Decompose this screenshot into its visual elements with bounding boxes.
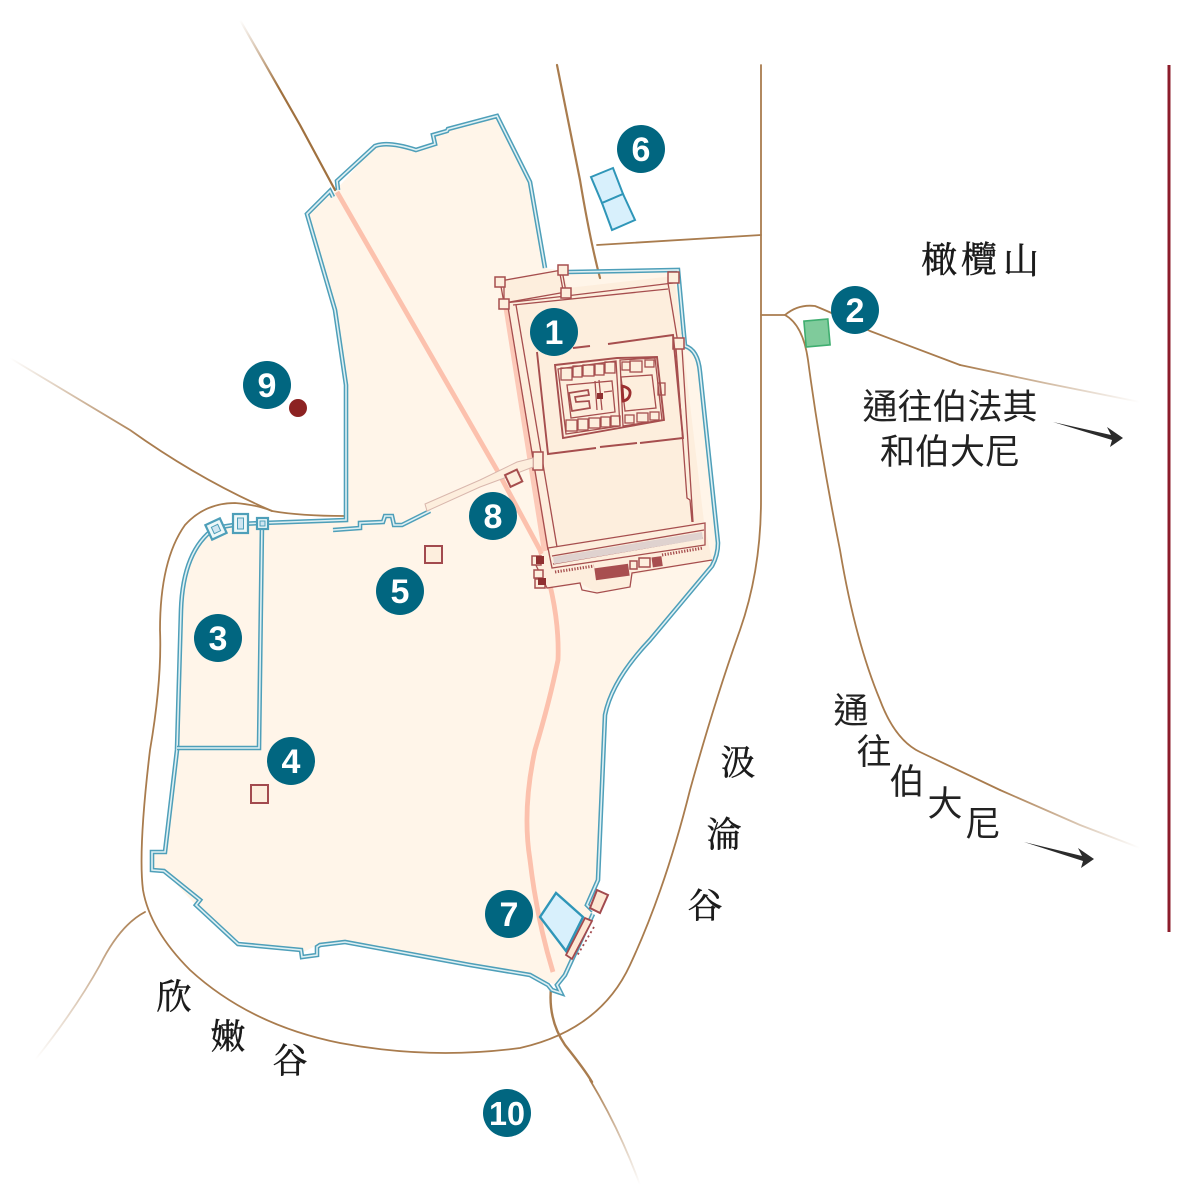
royal stoa stairs bbox=[594, 564, 630, 580]
number 2 bbox=[831, 286, 879, 334]
label: Mount of Olives bbox=[921, 240, 1039, 281]
number 8: 8 bbox=[484, 498, 502, 536]
stoa colonnade dots bbox=[555, 548, 703, 572]
number 10: 10 bbox=[489, 1095, 525, 1132]
number 4 bbox=[267, 737, 315, 785]
label: to Bethany: 大 bbox=[927, 785, 963, 824]
wall towers bbox=[205, 514, 268, 540]
corner towers bbox=[495, 265, 684, 588]
label: Hinnom Valley bbox=[156, 978, 308, 1081]
label: Kidron Valley: 谷 bbox=[687, 887, 723, 926]
temple complex bbox=[495, 265, 712, 593]
arrow: to Bethany bbox=[1024, 842, 1094, 868]
temple platform bbox=[500, 270, 712, 593]
inner wall and west extension bbox=[177, 511, 430, 748]
label: to Bethany: 伯 bbox=[889, 763, 925, 802]
number 9 bbox=[243, 361, 291, 409]
number 1: 1 bbox=[545, 314, 563, 352]
number 10 bbox=[483, 1089, 531, 1137]
label: to Bethphage and Bethany: 通往伯法其 bbox=[862, 388, 1038, 427]
number 5 bbox=[376, 567, 424, 615]
label: Hinnom Valley: 谷 bbox=[272, 1042, 308, 1081]
city area fill bbox=[152, 116, 718, 985]
number 1 bbox=[530, 308, 578, 356]
west road strip bbox=[503, 305, 549, 552]
number 3 bbox=[194, 614, 242, 662]
number 6: 6 bbox=[632, 131, 650, 169]
label: Mount of Olives: 欖 bbox=[961, 240, 997, 280]
label: Hinnom Valley: 欣 bbox=[156, 978, 192, 1017]
inner court dashed wall bbox=[537, 335, 683, 454]
label: to Bethphage and Bethany: 和伯大尼 bbox=[880, 433, 1020, 472]
sanctuary bbox=[555, 357, 664, 438]
label: to Bethany: 尼 bbox=[965, 805, 1001, 844]
label: Kidron Valley: 汲 bbox=[720, 744, 756, 783]
number 2: 2 bbox=[846, 292, 864, 330]
pool 6 bbox=[591, 168, 635, 230]
label: Hinnom Valley: 嫩 bbox=[210, 1018, 246, 1057]
number 4: 4 bbox=[282, 743, 301, 781]
number 7 bbox=[485, 890, 533, 938]
site marker 9 bbox=[289, 399, 307, 417]
label: Mount of Olives: 橄 bbox=[921, 240, 957, 280]
road: ancient street bbox=[337, 192, 558, 972]
label: Kidron Valley bbox=[687, 744, 756, 926]
arrow: to Bethphage bbox=[1053, 422, 1123, 447]
gate and path near 8 bbox=[425, 458, 533, 511]
number 3: 3 bbox=[209, 620, 227, 658]
city wall bbox=[152, 116, 718, 993]
number 6 bbox=[617, 125, 665, 173]
label: Mount of Olives: 山 bbox=[1003, 241, 1039, 281]
number 8 bbox=[469, 492, 517, 540]
number 9: 9 bbox=[258, 367, 276, 405]
pool 7 bbox=[540, 890, 608, 959]
site marker 5 bbox=[425, 546, 442, 563]
number 7: 7 bbox=[500, 896, 518, 934]
label: to Bethany: 往 bbox=[856, 733, 892, 772]
site marker 4 bbox=[251, 785, 268, 803]
label: to Bethany: 通 bbox=[833, 692, 869, 731]
red boundary line bbox=[1168, 65, 1170, 932]
number 5: 5 bbox=[391, 573, 409, 611]
label: Kidron Valley: 淪 bbox=[706, 816, 742, 855]
label: to Bethany bbox=[833, 692, 1001, 844]
label: to Bethphage and Bethany bbox=[862, 388, 1038, 472]
stoa grey strip bbox=[553, 532, 703, 564]
site marker 2 bbox=[804, 319, 830, 347]
